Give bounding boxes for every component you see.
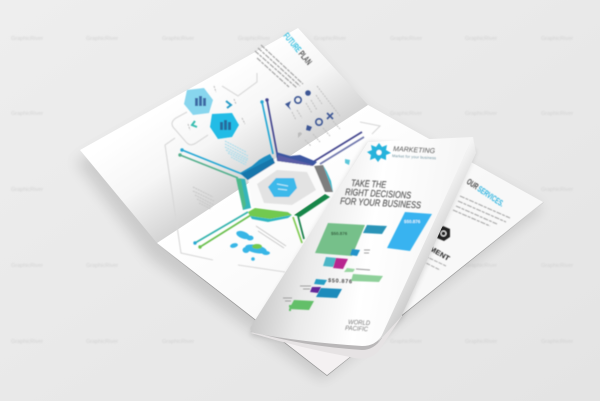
chart: light teal block (323, 257, 337, 267)
value label: $50.876 (328, 278, 352, 285)
central blue hexagon (268, 178, 297, 197)
watermarks: GraphicRiver (86, 36, 118, 42)
watermarks: GraphicRiver (541, 36, 573, 42)
watermarks: GraphicRiver (162, 339, 194, 345)
chart: teal small block (363, 225, 387, 234)
chart: large green block (315, 223, 365, 256)
chart: magenta block (333, 258, 348, 269)
icon: light hexagon (184, 88, 213, 115)
icon: black hexagon (437, 226, 450, 241)
page stack under brochure (250, 300, 402, 375)
central gray hexagon (257, 170, 316, 205)
main heading: FOR YOUR BUSINESS (340, 196, 422, 211)
watermarks: GraphicRiver (465, 111, 497, 117)
sheet edge line (157, 202, 544, 376)
map caption (256, 226, 286, 248)
main heading: TAKE THE (351, 178, 387, 191)
chart labels (283, 250, 370, 301)
watermarks: GraphicRiver (11, 36, 43, 42)
main heading: RIGHT DECISIONS (345, 187, 412, 201)
open sheet (80, 28, 544, 376)
watermarks: GraphicRiver (541, 263, 573, 269)
chart: blue small block (350, 249, 360, 256)
chart: teal block (314, 279, 327, 285)
marketing wordmark: MARKETING (393, 146, 436, 155)
intro paragraph (255, 45, 303, 88)
segment: teal (236, 178, 251, 210)
icon captions (292, 86, 340, 146)
marketing tagline: Market for your business (392, 154, 436, 160)
central hexagon label (277, 184, 288, 190)
title: future plan: FUTURE (281, 31, 303, 54)
world pacific label: WORLD (348, 319, 371, 327)
chart: purple block (310, 287, 321, 293)
watermarks: GraphicRiver (11, 111, 43, 117)
watermarks: GraphicRiver (86, 263, 118, 269)
chart: large blue block: $50.876 (404, 219, 421, 224)
watermarks: GraphicRiver (11, 263, 43, 269)
watermarks (11, 36, 573, 345)
segment: dark green (294, 194, 330, 217)
services paragraph (453, 196, 510, 226)
watermarks: GraphicRiver (541, 187, 573, 193)
segment: bright green (248, 208, 292, 222)
connector outlines (165, 73, 380, 272)
chart: small pale green block (344, 268, 355, 272)
watermarks: GraphicRiver (162, 36, 194, 42)
paper shadow (76, 36, 543, 380)
small teal chevrons (192, 101, 231, 127)
watermarks: GraphicRiver (541, 111, 573, 117)
services heading: SERVICES. (476, 184, 506, 209)
chart: blue block (316, 288, 342, 298)
world pacific label (345, 319, 371, 333)
brochure shadow (250, 142, 476, 350)
watermarks: GraphicRiver (11, 339, 43, 345)
icons grid (285, 90, 333, 138)
icon: bright hexagon (210, 113, 239, 139)
central outer hexagon (248, 158, 326, 214)
watermarks: GraphicRiver (86, 339, 118, 345)
watermarks: GraphicRiver (314, 36, 346, 42)
segment: gray (314, 165, 333, 192)
title: future plan: PLAN (297, 49, 314, 67)
chart: large green block: $50.876 (331, 231, 348, 236)
main heading (340, 178, 422, 211)
watermarks: GraphicRiver (465, 36, 497, 42)
watermarks: GraphicRiver (465, 339, 497, 345)
world map (230, 229, 270, 261)
spoke lines (180, 100, 364, 247)
teal marker (345, 159, 350, 165)
world pacific label: PACIFIC (345, 325, 368, 333)
small green squares (289, 305, 292, 311)
watermarks: GraphicRiver (390, 111, 422, 117)
chart: wide pale green block (351, 274, 383, 282)
watermarks: GraphicRiver (390, 36, 422, 42)
management text (422, 256, 446, 270)
management label: MENT (428, 246, 451, 263)
watermarks: GraphicRiver (541, 339, 573, 345)
chart: large blue block (387, 212, 432, 251)
logo icon (367, 143, 391, 162)
services heading (465, 176, 506, 209)
watermarks: GraphicRiver (238, 36, 270, 42)
watermarks: GraphicRiver (11, 187, 43, 193)
segment: blue (240, 154, 275, 180)
services heading: OUR (465, 176, 480, 191)
text block: left caption (193, 187, 214, 209)
watermarks: GraphicRiver (390, 339, 422, 345)
text block: blue hexagon caption (225, 141, 248, 165)
brochure front cover (250, 137, 473, 346)
watermarks: GraphicRiver (465, 263, 497, 269)
brochure back spine (378, 137, 476, 342)
small chevron labels (188, 86, 245, 130)
chart: green block (289, 300, 314, 310)
spoke end dots (178, 98, 269, 249)
segment: purple (276, 152, 317, 166)
